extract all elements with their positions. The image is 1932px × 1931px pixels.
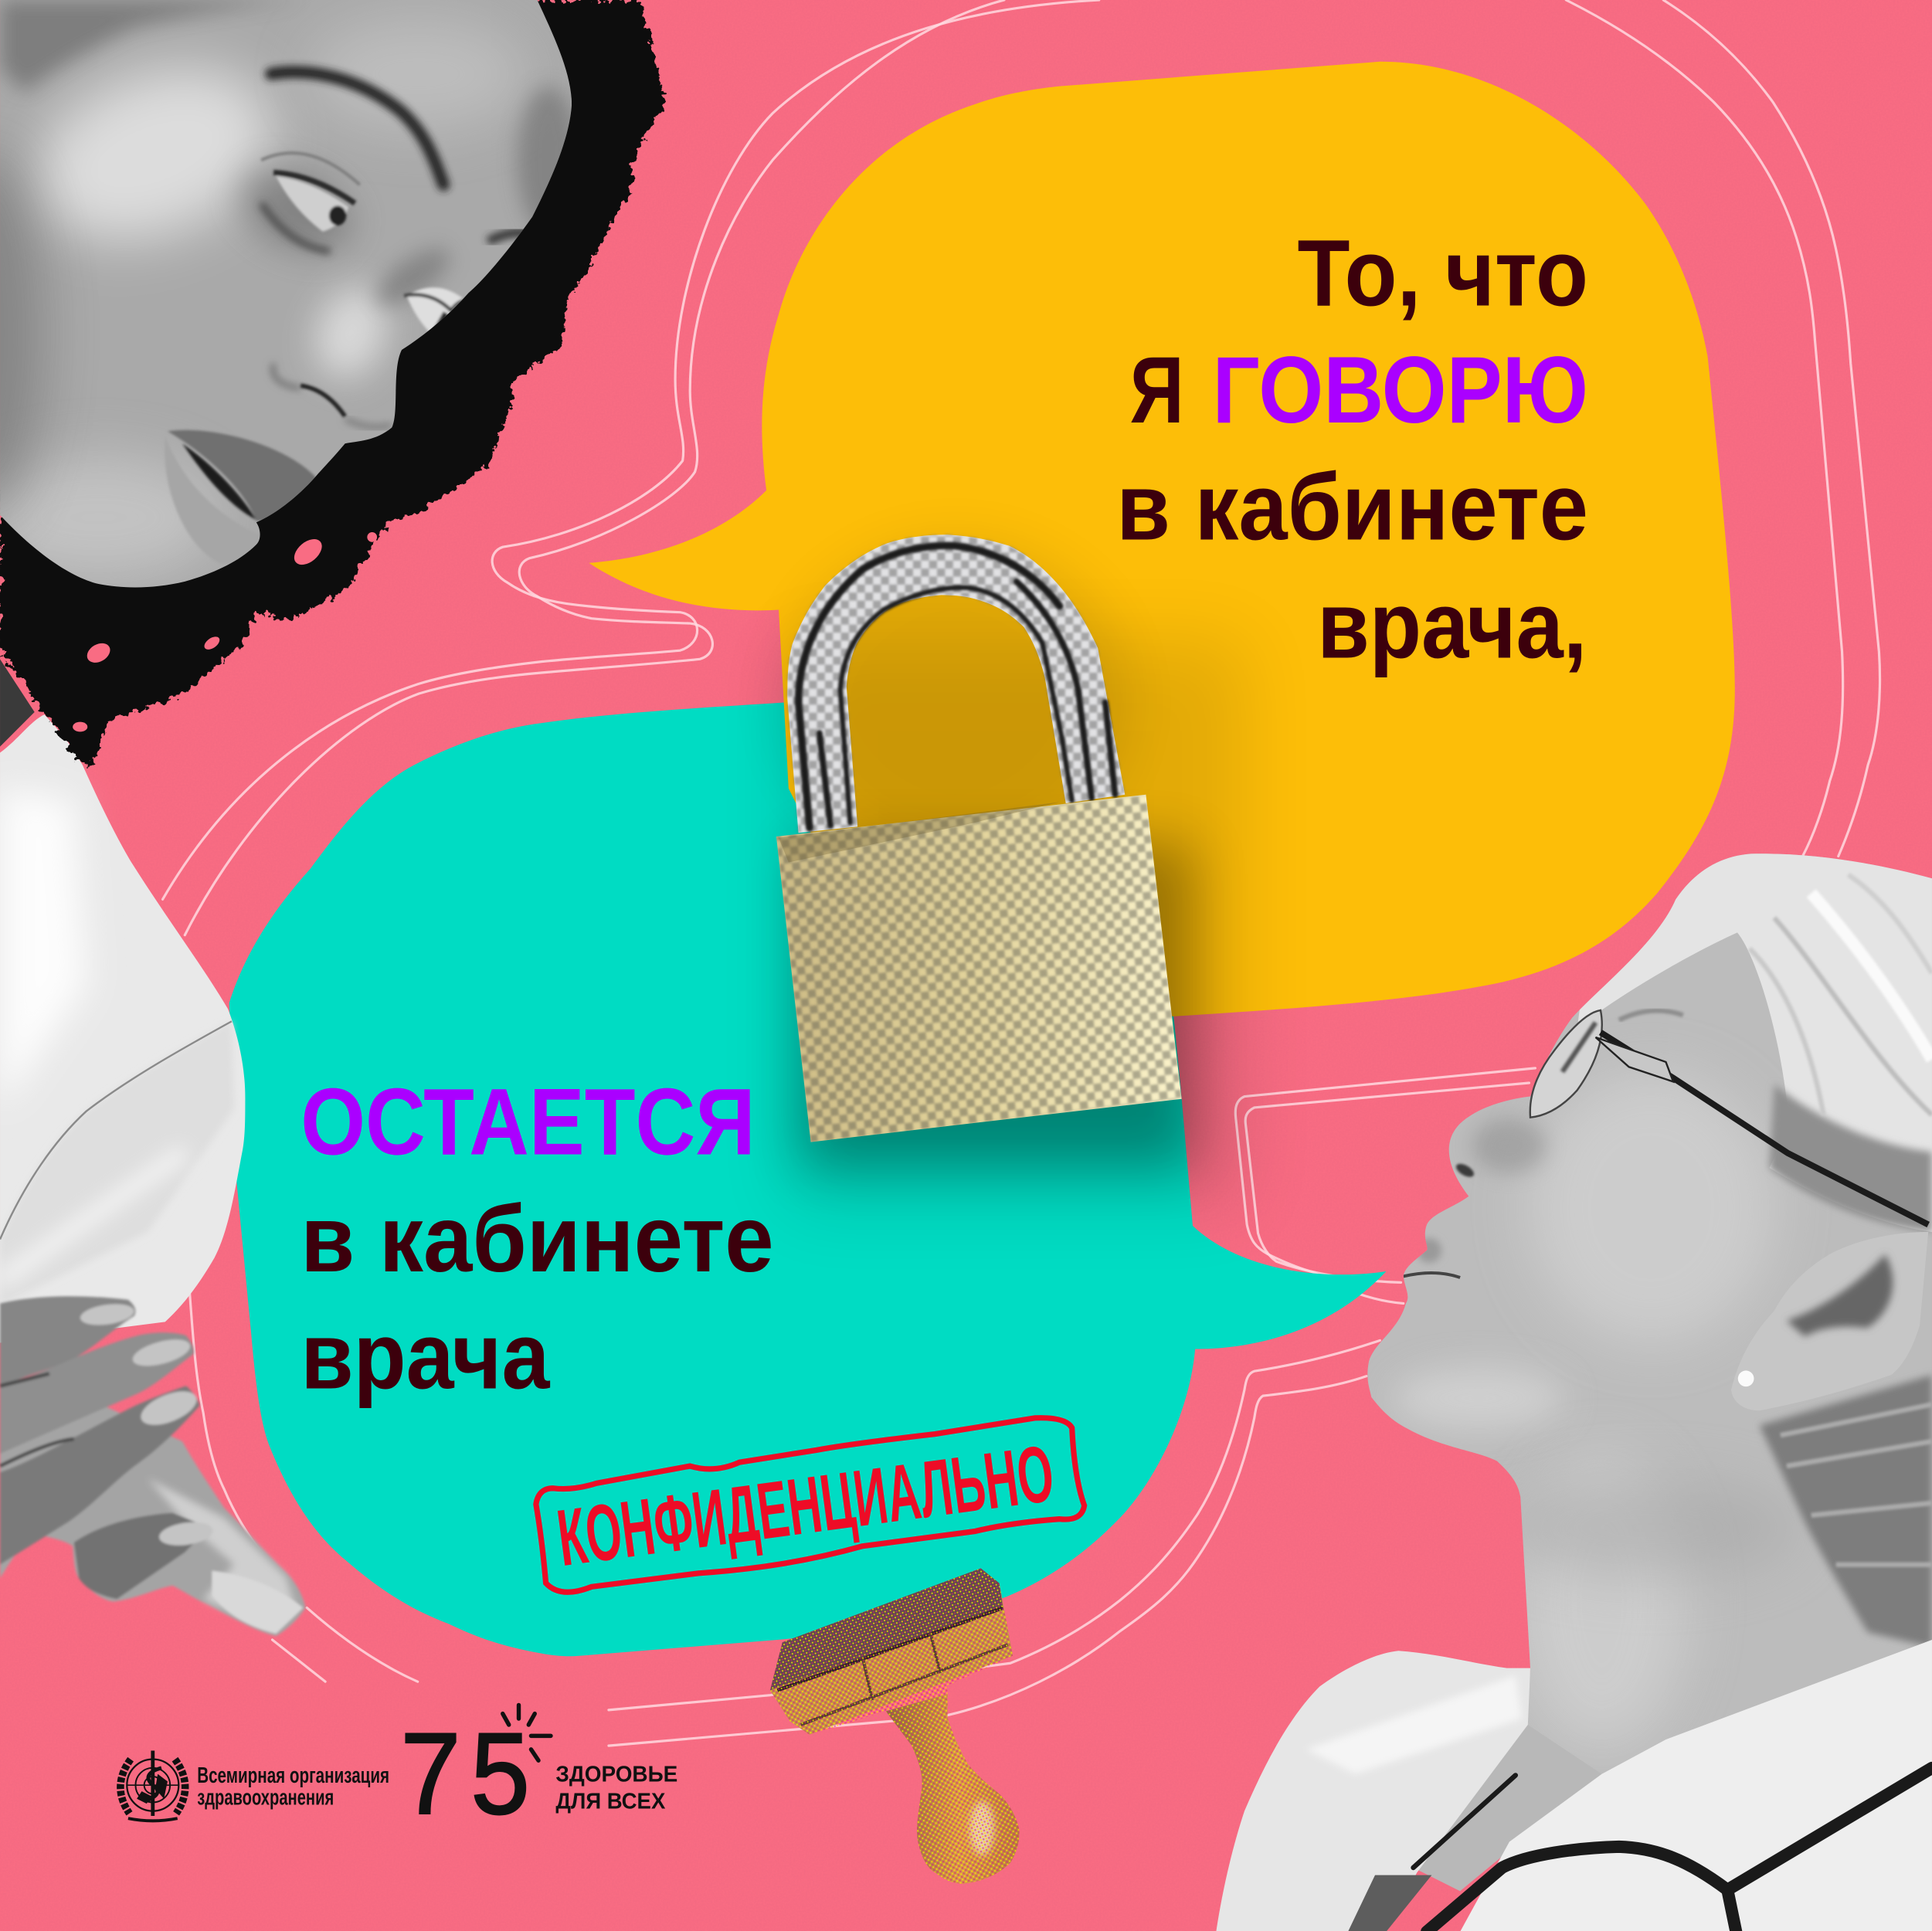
lips bbox=[165, 430, 316, 565]
doctor's glasses bbox=[1530, 1010, 1928, 1224]
fingernails bbox=[79, 1301, 303, 1634]
nose bbox=[273, 364, 300, 388]
padlock bbox=[776, 535, 1182, 1142]
line: То, что: То, что bbox=[1298, 221, 1588, 327]
near eye bbox=[261, 153, 360, 251]
eyebrow bbox=[1619, 1010, 1683, 1020]
woman's face bbox=[0, 0, 592, 604]
hair over forehead bbox=[1577, 838, 1932, 1648]
stamp text: КОНФИДЕНЦИАЛЬНО bbox=[552, 1428, 1059, 1583]
doctor's coat bbox=[1216, 1640, 1932, 1931]
shackle bbox=[787, 535, 1125, 833]
pink gaps in hair curls bbox=[73, 532, 377, 731]
line: ОСТАЕТСЯ: ОСТАЕТСЯ bbox=[300, 1070, 755, 1176]
slogan bbox=[555, 1762, 677, 1814]
line: врача,: врача, bbox=[1317, 573, 1587, 679]
WHO name line 2: здравоохранения bbox=[197, 1786, 334, 1811]
near eyebrow bbox=[271, 72, 443, 185]
nostril bbox=[1454, 1161, 1476, 1179]
woman's t-shirt bbox=[0, 714, 245, 1343]
WHO emblem bbox=[121, 1750, 185, 1821]
doctor's face and neck bbox=[1356, 838, 1932, 1824]
line: ГОВОРЮ: ГОВОРЮ bbox=[1212, 338, 1588, 443]
slogan line 1: ЗДОРОВЬЕ bbox=[555, 1762, 677, 1787]
far eyebrow bbox=[488, 232, 532, 242]
line: в кабинете: в кабинете bbox=[1116, 455, 1588, 561]
photo: doctor listening bbox=[1216, 838, 1932, 1931]
rays bbox=[503, 1705, 551, 1760]
WHO name line 1: Всемирная организация bbox=[197, 1763, 389, 1788]
stethoscope bbox=[1413, 1768, 1932, 1931]
mouth bbox=[1404, 1273, 1460, 1278]
woman's hand bbox=[0, 1296, 306, 1636]
doctor's ear and earring bbox=[1731, 1232, 1928, 1410]
digit 7: 7 bbox=[400, 1709, 461, 1838]
footer logos bbox=[121, 1705, 677, 1838]
neck shadow bbox=[0, 659, 35, 747]
woman's hair bbox=[0, 0, 665, 764]
line: в кабинете: в кабинете bbox=[300, 1186, 774, 1292]
lower bubble text bbox=[300, 1070, 774, 1410]
WHO name bbox=[197, 1763, 389, 1811]
WHO 75 logo bbox=[400, 1705, 551, 1838]
rubber stamp illustration bbox=[770, 1568, 1019, 1884]
padlock drop shadow bbox=[783, 542, 1244, 1207]
stamp frame bbox=[536, 1418, 1085, 1592]
stamp handle bbox=[886, 1694, 1019, 1884]
line: врача: врача bbox=[300, 1304, 551, 1410]
yellow speech bubble bbox=[589, 62, 1735, 1016]
digit 5: 5 bbox=[470, 1709, 530, 1838]
sweater bbox=[1348, 1875, 1431, 1931]
confidential stamp imprint bbox=[536, 1418, 1085, 1592]
upper bubble text bbox=[1116, 221, 1588, 679]
teal speech bubble bbox=[229, 702, 1386, 1656]
lock body bbox=[776, 795, 1182, 1142]
stamp head bbox=[770, 1568, 1013, 1735]
doctor's chest under collar bbox=[1413, 1725, 1602, 1891]
far eye bbox=[404, 287, 466, 336]
photo: woman speaking bbox=[0, 0, 665, 1636]
line: Я: Я bbox=[1130, 338, 1184, 443]
slogan line 2: ДЛЯ ВСЕХ bbox=[555, 1789, 665, 1814]
